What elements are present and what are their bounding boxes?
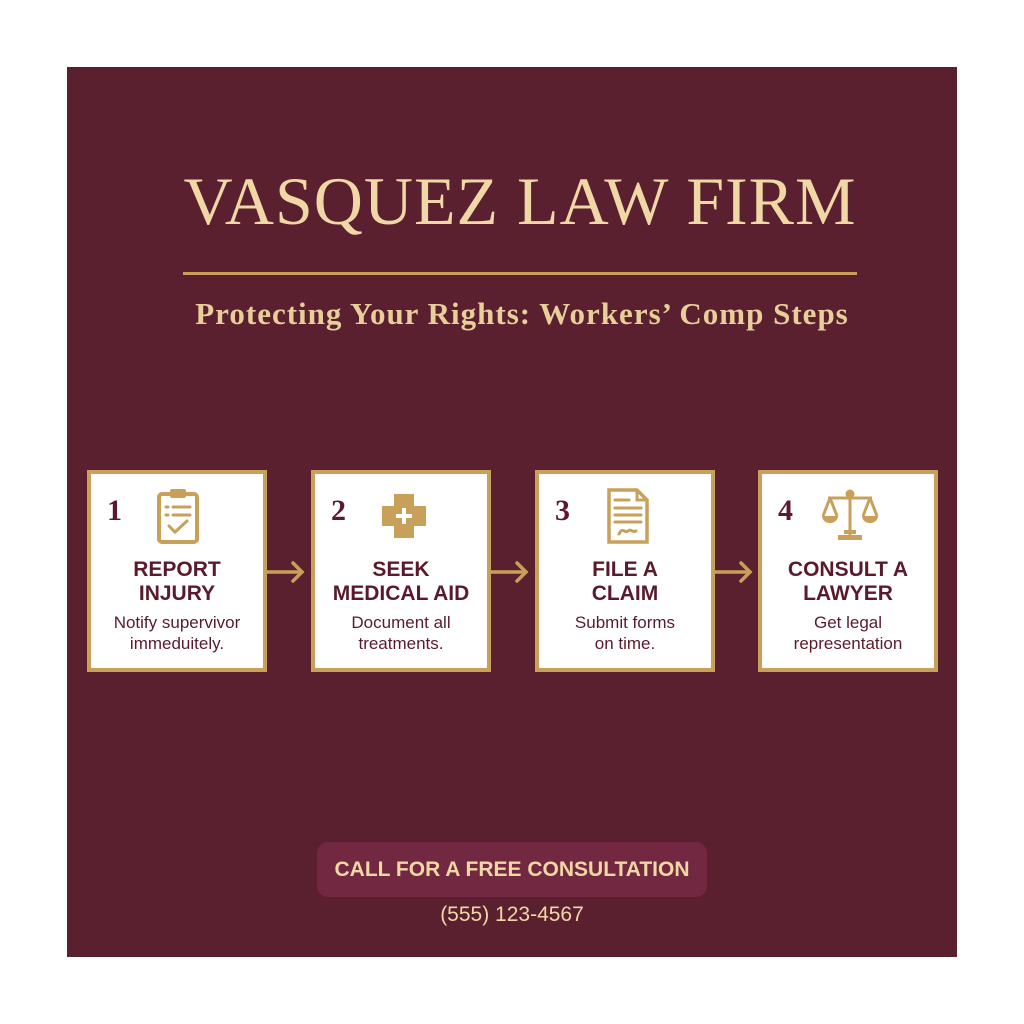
icon: medical cross <box>382 494 426 538</box>
card: step 1: 1 <box>107 494 122 527</box>
text: step 2 desc: treatments. <box>358 634 444 653</box>
icon: scales <box>822 490 878 540</box>
title: VASQUEZ LAW FIRM <box>184 163 856 239</box>
card: step 3: 3 <box>555 494 570 527</box>
card: step 2: 2 <box>331 494 346 527</box>
text: step 3 title: FILE A <box>592 558 658 581</box>
text: step 4 desc: Get legal <box>814 613 882 632</box>
arrow 3 <box>715 561 752 583</box>
text: phone: (555) 123-4567 <box>440 903 584 926</box>
text: step 4 title: CONSULT A <box>788 558 908 581</box>
card: step 2 <box>311 470 491 672</box>
text: step 1 desc: Notify supervivor <box>114 613 240 632</box>
arrow 1 <box>267 561 304 583</box>
text: step 2 title: MEDICAL AID <box>333 582 469 605</box>
card: step 4: 4 <box>778 494 793 527</box>
panel: background <box>67 67 957 957</box>
card: step 3 <box>535 470 715 672</box>
arrow 2 <box>491 561 528 583</box>
text: step 3 desc: Submit forms <box>575 613 675 632</box>
text: step 3 title <box>592 558 658 605</box>
text: step 1 title: INJURY <box>139 582 215 605</box>
text: step 2 title: SEEK <box>372 558 430 581</box>
icon: clipboard <box>157 489 199 544</box>
text: step 4 title: LAWYER <box>803 582 893 605</box>
text: step 4 desc <box>794 613 902 653</box>
text: step 1 desc: immeduitely. <box>130 634 224 653</box>
card: step 4 <box>758 470 938 672</box>
text: step 3 title: CLAIM <box>592 582 658 605</box>
text: step 1 desc <box>114 613 240 653</box>
button: call to action <box>317 842 707 897</box>
text: step 4 title <box>788 558 908 605</box>
text: step 1 title: REPORT <box>133 558 221 581</box>
button: call to action: CALL FOR A FREE CONSULTATION <box>334 858 690 881</box>
subtitle: Protecting Your Rights: Workers’ Comp Steps <box>195 296 849 331</box>
text: step 2 desc: Document all <box>351 613 451 632</box>
card: step 1 <box>87 470 267 672</box>
text: step 4 desc: representation <box>794 634 902 653</box>
text: step 3 desc: on time. <box>595 634 655 653</box>
text: step 1 title <box>133 558 221 605</box>
text: step 2 desc <box>351 613 451 653</box>
icon: document <box>607 488 649 544</box>
text: step 2 title <box>333 558 469 605</box>
text: step 3 desc <box>575 613 675 653</box>
